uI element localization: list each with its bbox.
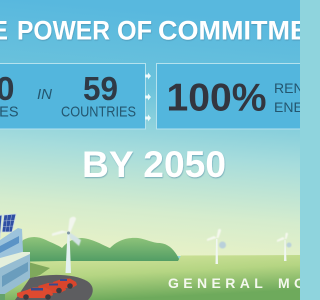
title: POWER [17, 16, 110, 46]
sky background [0, 0, 300, 256]
cars [17, 278, 77, 300]
icon: middle wind turbine [207, 229, 226, 264]
title [0, 16, 308, 46]
upper floor [0, 228, 23, 264]
icon: small wind turbine [277, 233, 292, 261]
road [15, 275, 93, 300]
title: OF [117, 16, 152, 46]
hills [15, 237, 180, 263]
ground [0, 255, 300, 300]
number: countries: 59 [83, 70, 118, 107]
car: rear [53, 278, 77, 289]
lower floor [0, 254, 30, 297]
building [0, 228, 30, 300]
heading: by 2050: BY 2050 [82, 144, 226, 185]
building shadow [28, 262, 50, 279]
word: in: IN [37, 86, 52, 103]
number: 100 percent: 100% [166, 76, 266, 120]
panel: companies and countries [0, 64, 146, 129]
logo text: general motors: GENERAL [168, 275, 267, 291]
icon: large wind turbine [52, 217, 81, 273]
icon: solar panels [0, 214, 16, 238]
label: countries: COUNTRIES [61, 104, 136, 120]
car: middle [38, 282, 66, 293]
car: front [17, 288, 53, 300]
panel: renewable energy [156, 64, 306, 129]
arrows between panels [145, 72, 151, 122]
